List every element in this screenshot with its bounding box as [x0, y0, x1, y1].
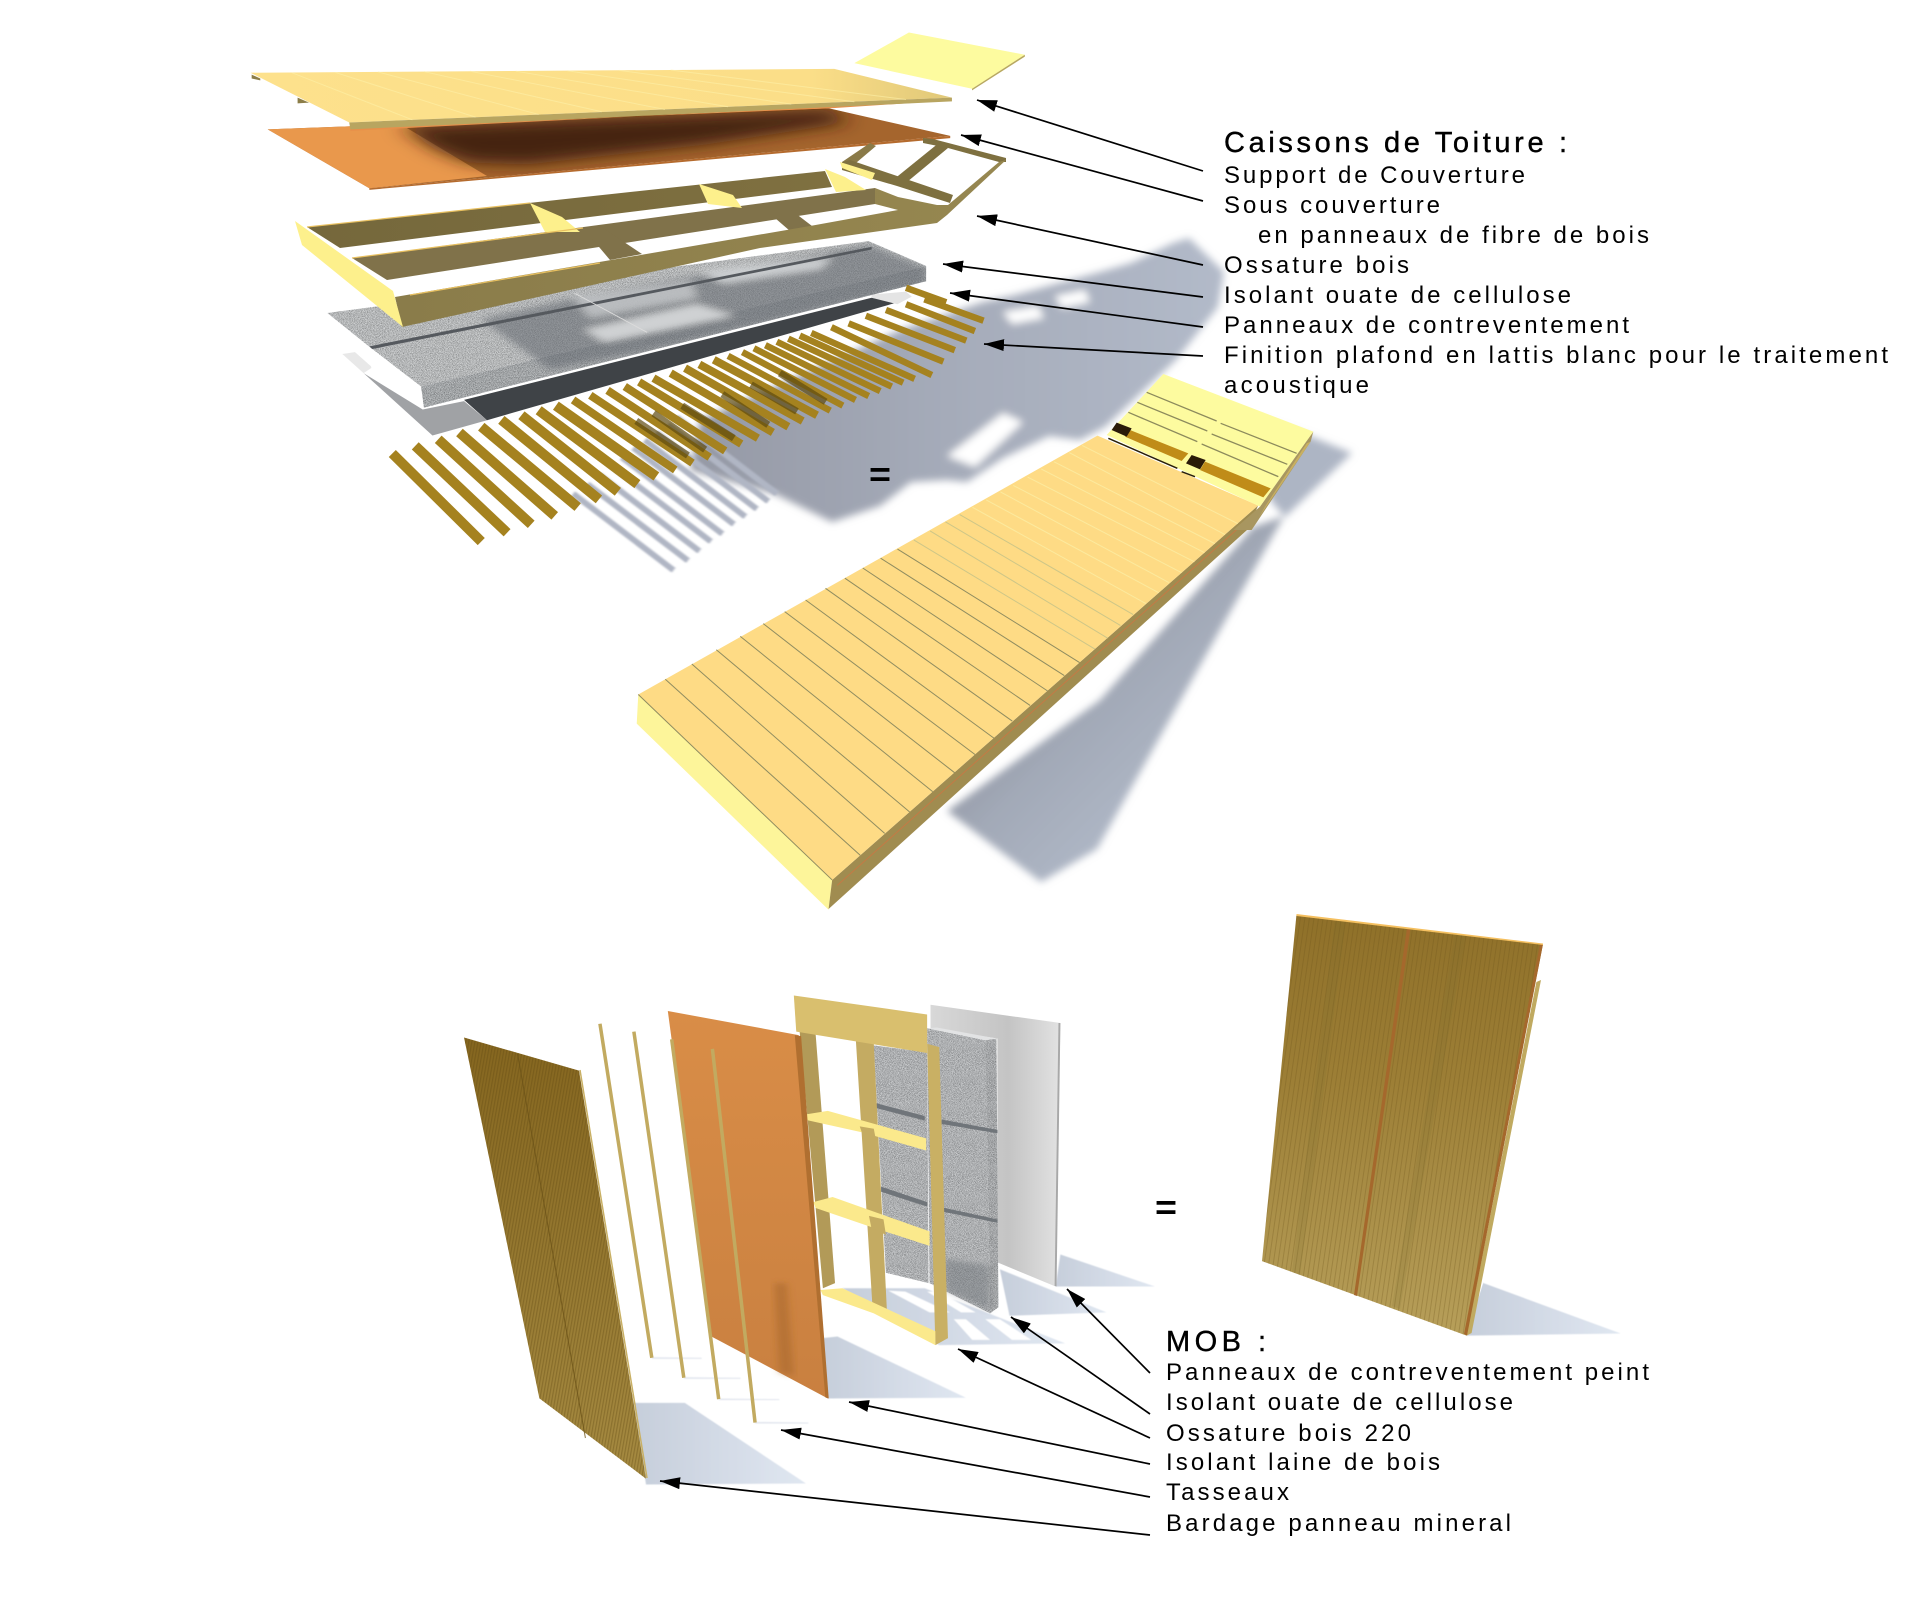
frame mid rail — [352, 188, 875, 280]
lattice ceiling finish — [392, 288, 984, 542]
battens — [600, 1024, 755, 1423]
assembled roof cast shadow — [947, 420, 1352, 882]
roof legend items — [1224, 162, 1888, 399]
wall legend items: Bardage panneau mineral — [1166, 1510, 1511, 1537]
wall legend items — [1166, 1359, 1649, 1537]
wall legend title: MOB : — [1166, 1326, 1266, 1358]
roof legend items: Support de Couverture — [1224, 162, 1525, 189]
wall legend — [1166, 1326, 1649, 1537]
wall legend items: Ossature bois 220 — [1166, 1420, 1411, 1447]
arrows: roof legend — [943, 100, 1203, 356]
roof cast shadow on ground — [690, 238, 1224, 522]
roof legend title: Caissons de Toiture : — [1224, 127, 1567, 159]
equals sign (wall): = — [1155, 1189, 1177, 1227]
frame back rail — [307, 171, 832, 248]
wall orange wood-wool panel — [668, 1011, 829, 1398]
exploded construction diagram — [250, 32, 1888, 1536]
roof legend items: Panneaux de contreventement — [1224, 312, 1629, 339]
assembled roof caisson — [637, 436, 1258, 910]
orange under-roof panel — [268, 108, 950, 190]
wall timber frame — [794, 995, 948, 1345]
equals sign (roof): = — [869, 456, 891, 494]
roof legend items: Finition plafond en lattis blanc pour le traitement — [1224, 342, 1888, 369]
small ceiling panel — [854, 33, 1025, 90]
roof legend items: Ossature bois — [1224, 252, 1409, 279]
wall legend items: Tasseaux — [1166, 1479, 1289, 1506]
roof legend items: Isolant ouate de cellulose — [1224, 282, 1571, 309]
frame far end members — [840, 138, 1006, 203]
assembled roof far end with ceiling panel — [1107, 374, 1313, 530]
timber frame — [295, 138, 1006, 327]
roof legend items: Sous couverture — [1224, 192, 1440, 219]
wall floor shadows — [634, 1254, 1155, 1485]
roof legend items: en panneaux de fibre de bois — [1258, 222, 1649, 249]
wall cellulose insulation — [874, 1028, 998, 1313]
assembled wall panel — [1262, 914, 1543, 1336]
insulation and bracing layers — [327, 241, 926, 436]
frame yellow joists — [530, 169, 866, 232]
roof legend items: acoustique — [1224, 372, 1369, 399]
frame cross pieces — [583, 203, 812, 260]
deck faces — [637, 695, 832, 910]
exterior cladding panel — [464, 1038, 647, 1479]
frame front rail with bend — [395, 160, 1006, 327]
assembled wall shadow — [1467, 1283, 1621, 1336]
lattice slat shadows — [573, 417, 777, 570]
wall legend items: Isolant ouate de cellulose — [1166, 1389, 1513, 1416]
roof legend — [1224, 127, 1888, 399]
wall legend items: Isolant laine de bois — [1166, 1449, 1440, 1476]
arrows: wall legend — [660, 1289, 1150, 1535]
wall exterior painted bracing panel — [931, 1005, 1060, 1287]
wall legend items: Panneaux de contreventement peint — [1166, 1359, 1649, 1386]
frame yellow end — [295, 221, 403, 327]
roof support panel — [251, 69, 952, 131]
